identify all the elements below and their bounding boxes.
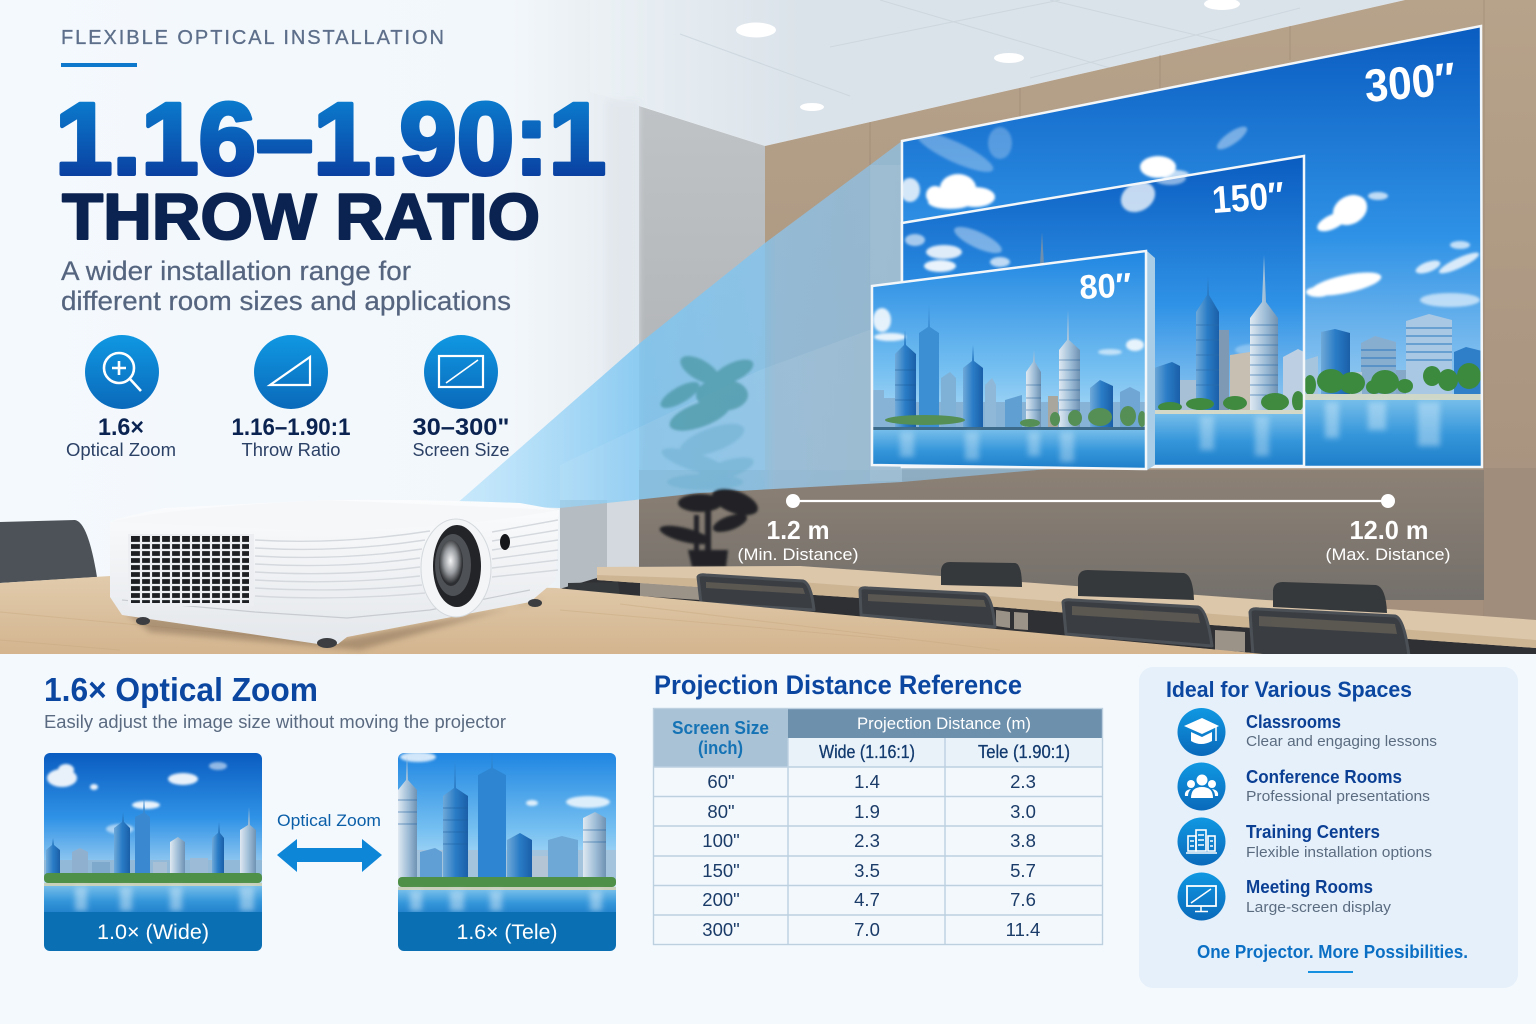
table header: Tele (1.90:1)	[978, 742, 1070, 762]
tagline: One Projector. More Possibilities.	[1197, 941, 1468, 962]
stat: screen size: 30–300"	[412, 414, 510, 441]
arrow: optical zoom	[277, 811, 382, 872]
ceiling	[590, 0, 1405, 146]
icon: screen	[424, 335, 498, 409]
buildings	[1040, 233, 1044, 264]
foreground chair	[0, 520, 97, 583]
label: 80 inch: 80″	[1078, 266, 1132, 307]
150 inch screen	[902, 156, 1306, 468]
item: training centers: Flexible installation options	[1246, 844, 1432, 861]
plant	[657, 350, 761, 567]
table rows: 300"	[702, 919, 740, 940]
left window area	[0, 0, 640, 654]
distance scale	[738, 494, 1450, 564]
skyline	[44, 860, 262, 880]
item: meeting rooms: Large-screen display	[1246, 899, 1392, 916]
photo: conference room scene	[0, 0, 1536, 662]
clouds	[904, 177, 1250, 354]
table rows: 3.8	[1010, 830, 1036, 851]
water	[870, 427, 1150, 430]
icon: buildings	[1178, 818, 1226, 866]
clouds	[900, 123, 1481, 307]
maximum distance: 12.0 m	[1350, 515, 1428, 545]
heading: projection distance reference: Projection Distance Reference	[654, 670, 1022, 700]
buildings	[1305, 356, 1318, 394]
back chairs	[568, 562, 1387, 613]
item: training centers: Training Centers	[1246, 822, 1380, 842]
table header	[653, 708, 1102, 767]
table rows: 7.6	[1010, 889, 1036, 910]
300 inch screen	[900, 26, 1490, 470]
body	[110, 500, 559, 644]
arrow: optical zoom: Optical Zoom	[277, 811, 381, 830]
table rows: 200"	[702, 889, 740, 910]
item: conference rooms: Professional presentations	[1246, 788, 1430, 805]
conference table	[597, 566, 1536, 648]
ridges	[255, 520, 558, 598]
projector shadow	[125, 598, 545, 650]
item: classrooms: Clear and engaging lessons	[1246, 733, 1437, 750]
table rows: 11.4	[1006, 919, 1040, 940]
desk surface	[0, 576, 1285, 656]
icon: display	[1178, 872, 1226, 920]
table rows: 2.3	[1010, 771, 1036, 792]
background skyline	[873, 390, 1146, 428]
table rows: 100"	[702, 830, 740, 851]
stat: screen size: Screen Size	[412, 439, 510, 460]
panel heading: Ideal for Various Spaces	[1166, 677, 1412, 702]
minimum distance	[738, 515, 858, 564]
side wall	[639, 106, 765, 590]
clouds	[400, 752, 610, 808]
water	[398, 887, 616, 890]
card: wide	[44, 753, 262, 951]
zoom description: Easily adjust the image size without moving the projector	[44, 712, 506, 732]
item: conference rooms: Conference Rooms	[1246, 767, 1402, 787]
heading: optical zoom: 1.6× Optical Zoom	[44, 671, 318, 708]
table header: Screen Size	[672, 718, 769, 738]
projector	[110, 500, 559, 648]
stat: screen size	[412, 335, 510, 460]
table rows: 3.5	[854, 860, 880, 881]
stat: throw ratio: Throw Ratio	[242, 439, 340, 460]
table rows: 3.0	[1010, 801, 1036, 822]
title: throw ratio value: 1.16–1.90:1	[55, 82, 606, 196]
icon: magnifier	[85, 335, 159, 409]
table rows: 5.7	[1010, 860, 1036, 881]
table header: (inch)	[698, 738, 743, 758]
card: wide: 1.0× (Wide)	[97, 921, 209, 944]
vent grille	[128, 534, 254, 606]
table rows: 2.3	[854, 830, 880, 851]
lens	[421, 519, 491, 617]
minimum distance: (Min. Distance)	[738, 545, 858, 564]
maximum distance: (Max. Distance)	[1326, 545, 1450, 564]
stat: optical zoom: 1.6×	[98, 414, 144, 441]
table header: Projection Distance (m)	[857, 714, 1031, 733]
water	[1150, 410, 1306, 414]
subtitle	[61, 256, 511, 316]
ceiling lights	[736, 0, 1240, 111]
table rows: 1.9	[854, 801, 880, 822]
buildings	[895, 330, 916, 428]
table rows: 60"	[707, 771, 735, 792]
trees	[1158, 391, 1303, 410]
eyebrow heading	[61, 27, 444, 67]
panel: ideal for various spaces	[1139, 667, 1518, 988]
icon: graduation cap	[1178, 708, 1226, 756]
wood panel wall	[765, 0, 1536, 640]
stat: optical zoom: Optical Zoom	[66, 439, 176, 460]
clouds	[47, 762, 227, 834]
eyebrow heading: FLEXIBLE OPTICAL INSTALLATION	[61, 27, 444, 49]
label: 300 inch: 300″	[1362, 52, 1458, 112]
item: training centers	[1178, 818, 1432, 866]
item: conference rooms	[1178, 762, 1430, 810]
trees	[885, 406, 1146, 427]
lower back wall	[639, 470, 1484, 600]
caption band	[398, 912, 616, 951]
front chairs	[698, 575, 1409, 656]
table: projection distance	[653, 708, 1102, 944]
plant shadow in beam	[657, 350, 757, 437]
label: 150 inch: 150″	[1211, 175, 1285, 222]
maximum distance	[1326, 515, 1450, 564]
table rows: 150"	[702, 860, 740, 881]
80 inch screen	[870, 251, 1155, 471]
plant leaves and pot	[658, 483, 761, 567]
item: meeting rooms: Meeting Rooms	[1246, 877, 1373, 897]
feet	[136, 599, 542, 648]
table rows: 4.7	[854, 889, 880, 910]
projected beam	[455, 141, 1060, 508]
card: tele	[398, 752, 616, 951]
table rows	[653, 708, 1102, 944]
table rows: 80"	[707, 801, 735, 822]
stat: optical zoom	[66, 335, 176, 460]
title: throw ratio: THROW RATIO	[62, 180, 540, 253]
water	[1300, 394, 1490, 400]
subtitle: A wider installation range for	[61, 256, 411, 286]
table rows: 7.0	[854, 919, 880, 940]
item: classrooms	[1178, 708, 1437, 756]
sensor	[500, 534, 510, 550]
scale line	[793, 500, 1388, 502]
stat: throw ratio	[232, 335, 350, 460]
item: meeting rooms	[1178, 872, 1392, 920]
water	[44, 883, 262, 886]
table header: Wide (1.16:1)	[819, 742, 915, 762]
table rows: 1.4	[854, 771, 880, 792]
subtitle: different room sizes and applications	[61, 286, 511, 316]
trees	[1304, 363, 1481, 395]
under table	[556, 578, 1536, 656]
item: classrooms: Classrooms	[1246, 712, 1341, 732]
stat: throw ratio: 1.16–1.90:1	[232, 414, 350, 441]
card: tele: 1.6× (Tele)	[456, 921, 558, 944]
caption band	[44, 912, 262, 951]
skyline	[398, 850, 616, 885]
icon: triangle	[254, 335, 328, 409]
minimum distance: 1.2 m	[766, 515, 830, 545]
icon: people	[1178, 762, 1226, 810]
clouds	[873, 308, 1144, 355]
